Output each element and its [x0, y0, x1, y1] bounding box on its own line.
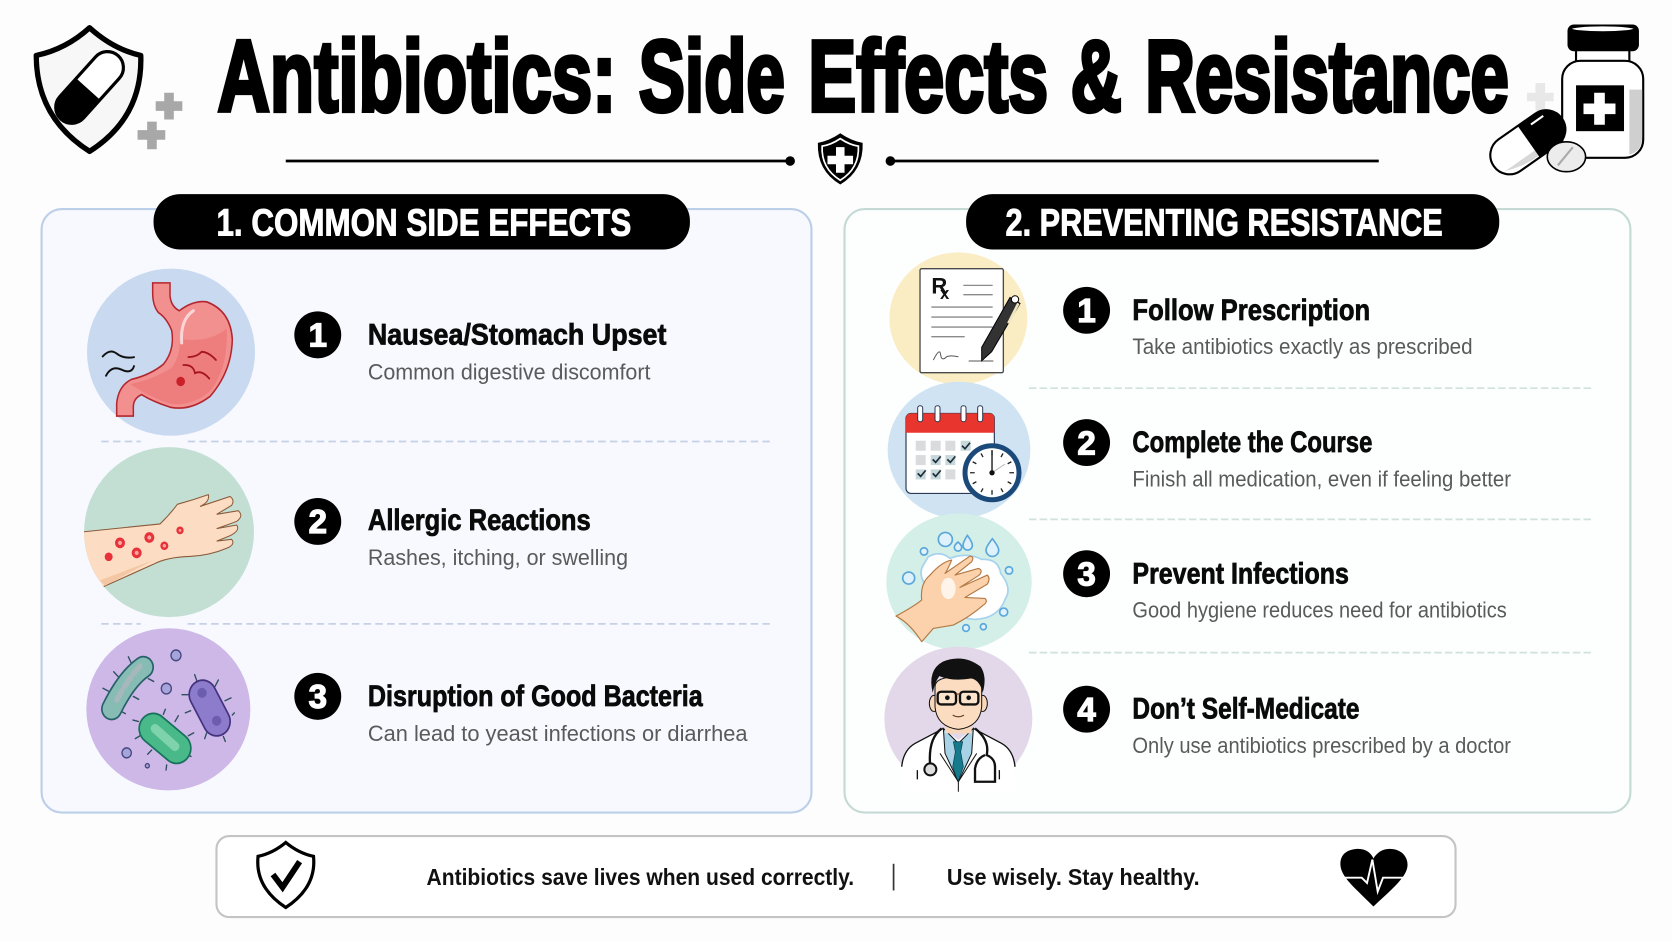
footer message: Antibiotics save lives when used correctly.: [427, 864, 854, 890]
item: complete the course: Complete the Course: [1132, 426, 1372, 459]
heading: preventing resistance: 2. PREVENTING RESISTANCE: [1006, 202, 1443, 245]
item: allergic reactions: [368, 504, 628, 570]
item: don't self-medicate: Only use antibiotics prescribed by a doctor: [1132, 733, 1511, 758]
icon: stomach: [87, 269, 255, 436]
item: follow prescription: Take antibiotics exactly as prescribed: [1132, 334, 1473, 359]
footer message: Use wisely. Stay healthy.: [947, 864, 1200, 890]
icon: prescription: [889, 252, 1027, 384]
number badge 3: [294, 673, 341, 720]
title: Side: [639, 20, 785, 133]
item: follow prescription: [1132, 294, 1473, 359]
icon: prescription: x: [940, 284, 950, 303]
item: prevent infections: Good hygiene reduces need for antibiotics: [1132, 597, 1507, 622]
number badge 1: 1: [309, 318, 327, 355]
number badge 2: 2: [309, 504, 327, 541]
icon: shield with capsule: [36, 28, 182, 151]
title: [218, 20, 1509, 133]
title: &: [1071, 20, 1122, 133]
panel: common side effects: [42, 194, 811, 813]
panel: preventing resistance: [845, 194, 1630, 813]
footer message: [427, 864, 1200, 890]
icon: calendar and clock: [888, 382, 1030, 518]
number badge 2: 2: [1077, 425, 1096, 462]
icon: shield check: [258, 842, 314, 908]
number badge 2: [294, 498, 341, 545]
item: complete the course: [1132, 426, 1511, 491]
item: nausea: Common digestive discomfort: [368, 360, 651, 385]
item: disruption of good bacteria: Can lead to yeast infections or diarrhea: [368, 721, 748, 746]
icon: doctor: [884, 647, 1032, 792]
heading: common side effects: 1. COMMON SIDE EFFECTS: [216, 202, 631, 245]
number badge 2: [1063, 419, 1110, 466]
number badge 4: 4: [1077, 692, 1096, 729]
heading: common side effects: [154, 194, 690, 250]
icon: hand washing: [886, 513, 1032, 650]
number badge 3: [1063, 550, 1110, 597]
item: follow prescription: Follow Prescription: [1132, 294, 1370, 327]
number badge 1: [294, 311, 341, 358]
title: Resistance: [1145, 20, 1509, 133]
icon: prescription: R: [931, 273, 947, 298]
number badge 1: [1063, 287, 1110, 334]
title divider with shield: [286, 133, 1379, 184]
item: disruption of good bacteria: Disruption of Good Bacteria: [368, 680, 703, 713]
number badge 3: 3: [309, 679, 327, 716]
icon: medicine bottle and pills: [1483, 25, 1643, 182]
item: allergic reactions: Allergic Reactions: [368, 504, 591, 537]
item: don't self-medicate: Don’t Self-Medicate: [1132, 693, 1360, 726]
item: nausea: Nausea/Stomach Upset: [368, 318, 667, 351]
number badge 3: 3: [1077, 556, 1096, 593]
icon: bacteria: [86, 628, 250, 790]
title: Antibiotics:: [218, 20, 616, 133]
title: Effects: [808, 20, 1048, 133]
heading: preventing resistance: [966, 194, 1499, 250]
item: disruption of good bacteria: [368, 680, 748, 746]
item: don't self-medicate: [1132, 693, 1511, 758]
icon: heart with pulse: [1340, 849, 1408, 906]
number badge 1: 1: [1077, 293, 1096, 330]
item: prevent infections: [1132, 557, 1507, 622]
item: nausea: [368, 318, 667, 385]
icon: allergic rash arm: [80, 447, 254, 617]
item: complete the course: Finish all medication, even if feeling better: [1132, 466, 1511, 491]
item: prevent infections: Prevent Infections: [1132, 557, 1349, 590]
footer banner: [216, 836, 1456, 917]
number badge 4: [1063, 686, 1110, 733]
item: allergic reactions: Rashes, itching, or swelling: [368, 545, 628, 570]
